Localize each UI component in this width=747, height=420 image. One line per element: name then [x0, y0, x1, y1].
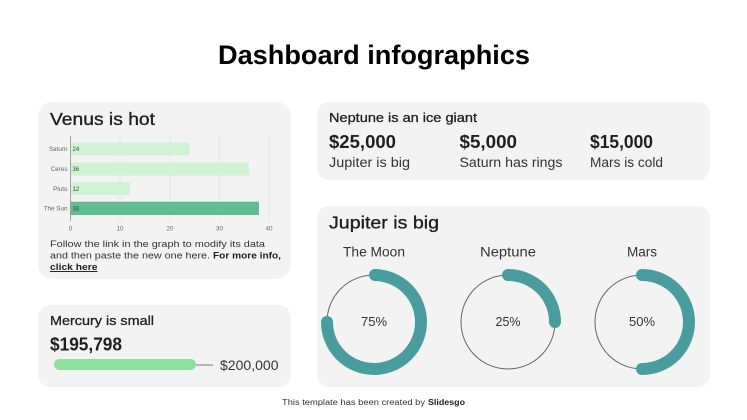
donut: Mars 50%: Mars — [627, 244, 657, 260]
text block: chart note: click here — [50, 262, 98, 273]
panel: Mercury is small — [38, 305, 291, 387]
bar chart: 20 — [166, 226, 174, 232]
bar chart: 24 — [72, 147, 80, 153]
heading: Venus is hot: Venus is hot — [50, 109, 155, 129]
panel: Venus is hot — [38, 102, 291, 279]
text block: chart note: Follow the link in the graph to modify its data — [50, 239, 266, 250]
heading: Neptune is an ice giant: Neptune is an ice giant — [329, 110, 477, 125]
stat: Mars — [590, 132, 663, 170]
donut: Neptune 25%: Neptune — [480, 244, 536, 260]
bar: The Sun — [70, 202, 259, 215]
panel: Neptune is an ice giant — [317, 102, 710, 180]
bar chart: 36 — [72, 167, 80, 173]
stat: Saturn — [460, 132, 563, 170]
heading: Mercury is small: Mercury is small — [50, 313, 154, 328]
donut: Neptune 25% — [461, 244, 555, 369]
bar chart: 30 — [216, 226, 223, 232]
stat: Saturn: Saturn has rings — [460, 155, 563, 170]
donut: Mars 50% — [595, 244, 689, 369]
donut: The Moon 75%: The Moon — [343, 244, 405, 260]
bar chart: 40 — [265, 226, 273, 232]
heading: Jupiter is big: Jupiter is big — [329, 212, 439, 232]
panel: Jupiter is big — [317, 206, 710, 387]
stat: Mars: $15,000 — [590, 132, 653, 152]
bar: Ceres — [70, 162, 249, 176]
footer credit — [282, 398, 465, 407]
value: $195,798 — [50, 334, 122, 354]
stat: Jupiter — [329, 132, 410, 170]
stat: Jupiter: $25,000 — [329, 132, 396, 152]
bar chart: Ceres — [51, 166, 68, 173]
footer credit: This template has been created by — [282, 398, 425, 407]
target value: $200,000 — [220, 358, 278, 373]
bar chart: 12 — [72, 187, 80, 193]
text block: chart note: For more info, — [213, 250, 281, 262]
stat: Jupiter: Jupiter is big — [329, 155, 410, 170]
bar: Saturn — [70, 143, 190, 155]
bar chart: 10 — [116, 226, 124, 232]
stat: Mars: Mars is cold — [590, 155, 663, 170]
donut: Mars 50%: 50% — [629, 315, 655, 329]
text block: chart note: and then paste the new one here. — [50, 250, 210, 262]
bar chart — [44, 136, 273, 232]
bar chart: The Sun — [44, 206, 68, 212]
donut: The Moon 75% — [327, 244, 421, 369]
bar chart: 38 — [72, 206, 80, 212]
bar chart: Pluto — [53, 186, 68, 193]
donut: The Moon 75%: 75% — [361, 315, 387, 329]
title: Dashboard infographics — [218, 40, 530, 70]
bar: Pluto — [70, 182, 130, 195]
footer credit: Slidesgo — [428, 398, 465, 407]
progress bar — [54, 359, 213, 370]
bar chart: Saturn — [49, 146, 68, 153]
donut: Neptune 25%: 25% — [496, 315, 520, 329]
bar chart: 0 — [69, 226, 73, 232]
stat: Saturn: $5,000 — [460, 132, 517, 152]
text block: chart note — [50, 239, 281, 273]
